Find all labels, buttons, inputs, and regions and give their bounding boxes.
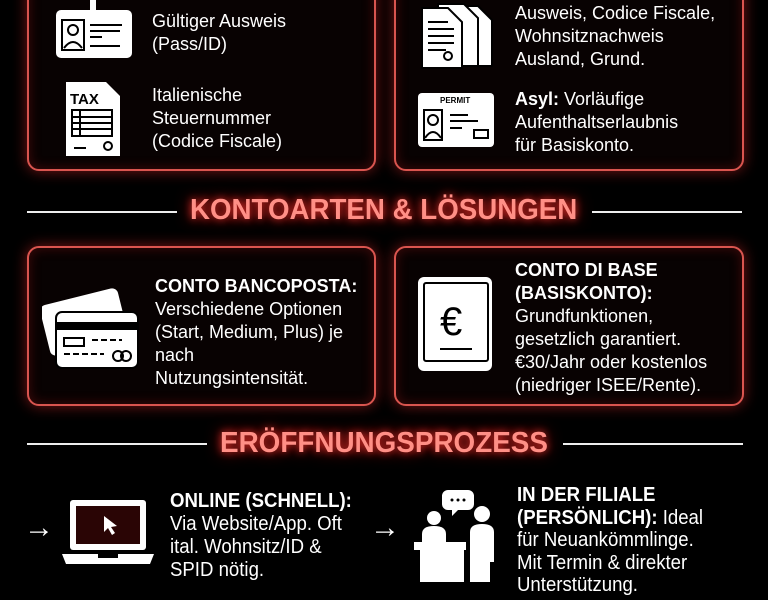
text: branch <box>517 484 703 596</box>
text: branch: Mit Termin & direkter <box>517 552 687 574</box>
text: valid ID: Gültiger Ausweis <box>152 11 286 31</box>
text: bancoposta: nach <box>155 345 194 365</box>
text: basiskonto: €30/Jahr oder kostenlos <box>515 352 707 372</box>
text: basiskonto: (BASISKONTO): <box>515 283 653 303</box>
icon: tax document <box>66 82 120 156</box>
text: online: ital. Wohnsitz/ID & <box>170 536 322 558</box>
text: bancoposta: (Start, Medium, Plus) je <box>155 322 343 342</box>
heading: opening process: ERÖFFNUNGSPROZESS <box>220 427 548 459</box>
text: branch: (PERSÖNLICH): Ideal <box>517 506 703 528</box>
text: asylum: Asyl: Vorläufige <box>515 89 644 109</box>
text: online <box>170 490 352 581</box>
icon: branch counter <box>414 490 494 582</box>
icon: tax document: TAX <box>70 91 99 108</box>
icon: permit card: PERMIT <box>440 96 470 105</box>
icon: id badge <box>56 0 132 58</box>
text: documents list: Ausweis, Codice Fiscale, <box>515 3 715 23</box>
text: branch: IN DER FILIALE <box>517 484 655 506</box>
arrow: online: → <box>24 511 54 544</box>
text: bancoposta <box>155 276 357 388</box>
text: documents list: Wohnsitznachweis <box>515 26 664 46</box>
heading: account types: KONTOARTEN & LÖSUNGEN <box>190 194 577 226</box>
icon: euro book <box>418 277 492 371</box>
text: asylum: Aufenthaltserlaubnis <box>515 112 678 132</box>
text: asylum <box>515 89 678 155</box>
text: basiskonto: CONTO DI BASE <box>515 260 658 280</box>
text: tax code: Italienische <box>152 85 242 105</box>
text: online: SPID nötig. <box>170 559 264 581</box>
icon: laptop <box>62 500 154 564</box>
text: valid ID <box>152 11 286 54</box>
panel: conto di base <box>394 246 744 406</box>
text: bancoposta: Verschiedene Optionen <box>155 299 342 319</box>
text: basiskonto <box>515 260 707 395</box>
text: tax code <box>152 85 282 151</box>
text: basiskonto: (niedriger ISEE/Rente). <box>515 375 701 395</box>
text: online: Via Website/App. Oft <box>170 513 342 535</box>
text: branch: Unterstützung. <box>517 574 638 596</box>
text: documents list <box>515 3 715 69</box>
arrow: branch: → <box>370 511 400 544</box>
panel: top left documents <box>27 0 376 171</box>
text: asylum: für Basiskonto. <box>515 135 634 155</box>
text: basiskonto: gesetzlich garantiert. <box>515 329 681 349</box>
icon: stacked documents <box>423 5 491 67</box>
panel: top right documents <box>394 0 744 171</box>
text: bancoposta: Nutzungsintensität. <box>155 368 308 388</box>
icon: permit card <box>418 93 494 147</box>
text: branch: für Neuankömmlinge. <box>517 529 694 551</box>
text: documents list: Ausland, Grund. <box>515 49 645 69</box>
text: tax code: (Codice Fiscale) <box>152 131 282 151</box>
text: basiskonto: Grundfunktionen, <box>515 306 653 326</box>
icon: credit cards <box>42 288 137 367</box>
text: valid ID: (Pass/ID) <box>152 34 227 54</box>
text: online: ONLINE (SCHNELL): <box>170 490 352 512</box>
text: tax code: Steuernummer <box>152 108 271 128</box>
text: bancoposta: CONTO BANCOPOSTA: <box>155 276 357 296</box>
icon: euro book: € <box>440 300 462 344</box>
panel: conto bancoposta <box>27 246 376 406</box>
